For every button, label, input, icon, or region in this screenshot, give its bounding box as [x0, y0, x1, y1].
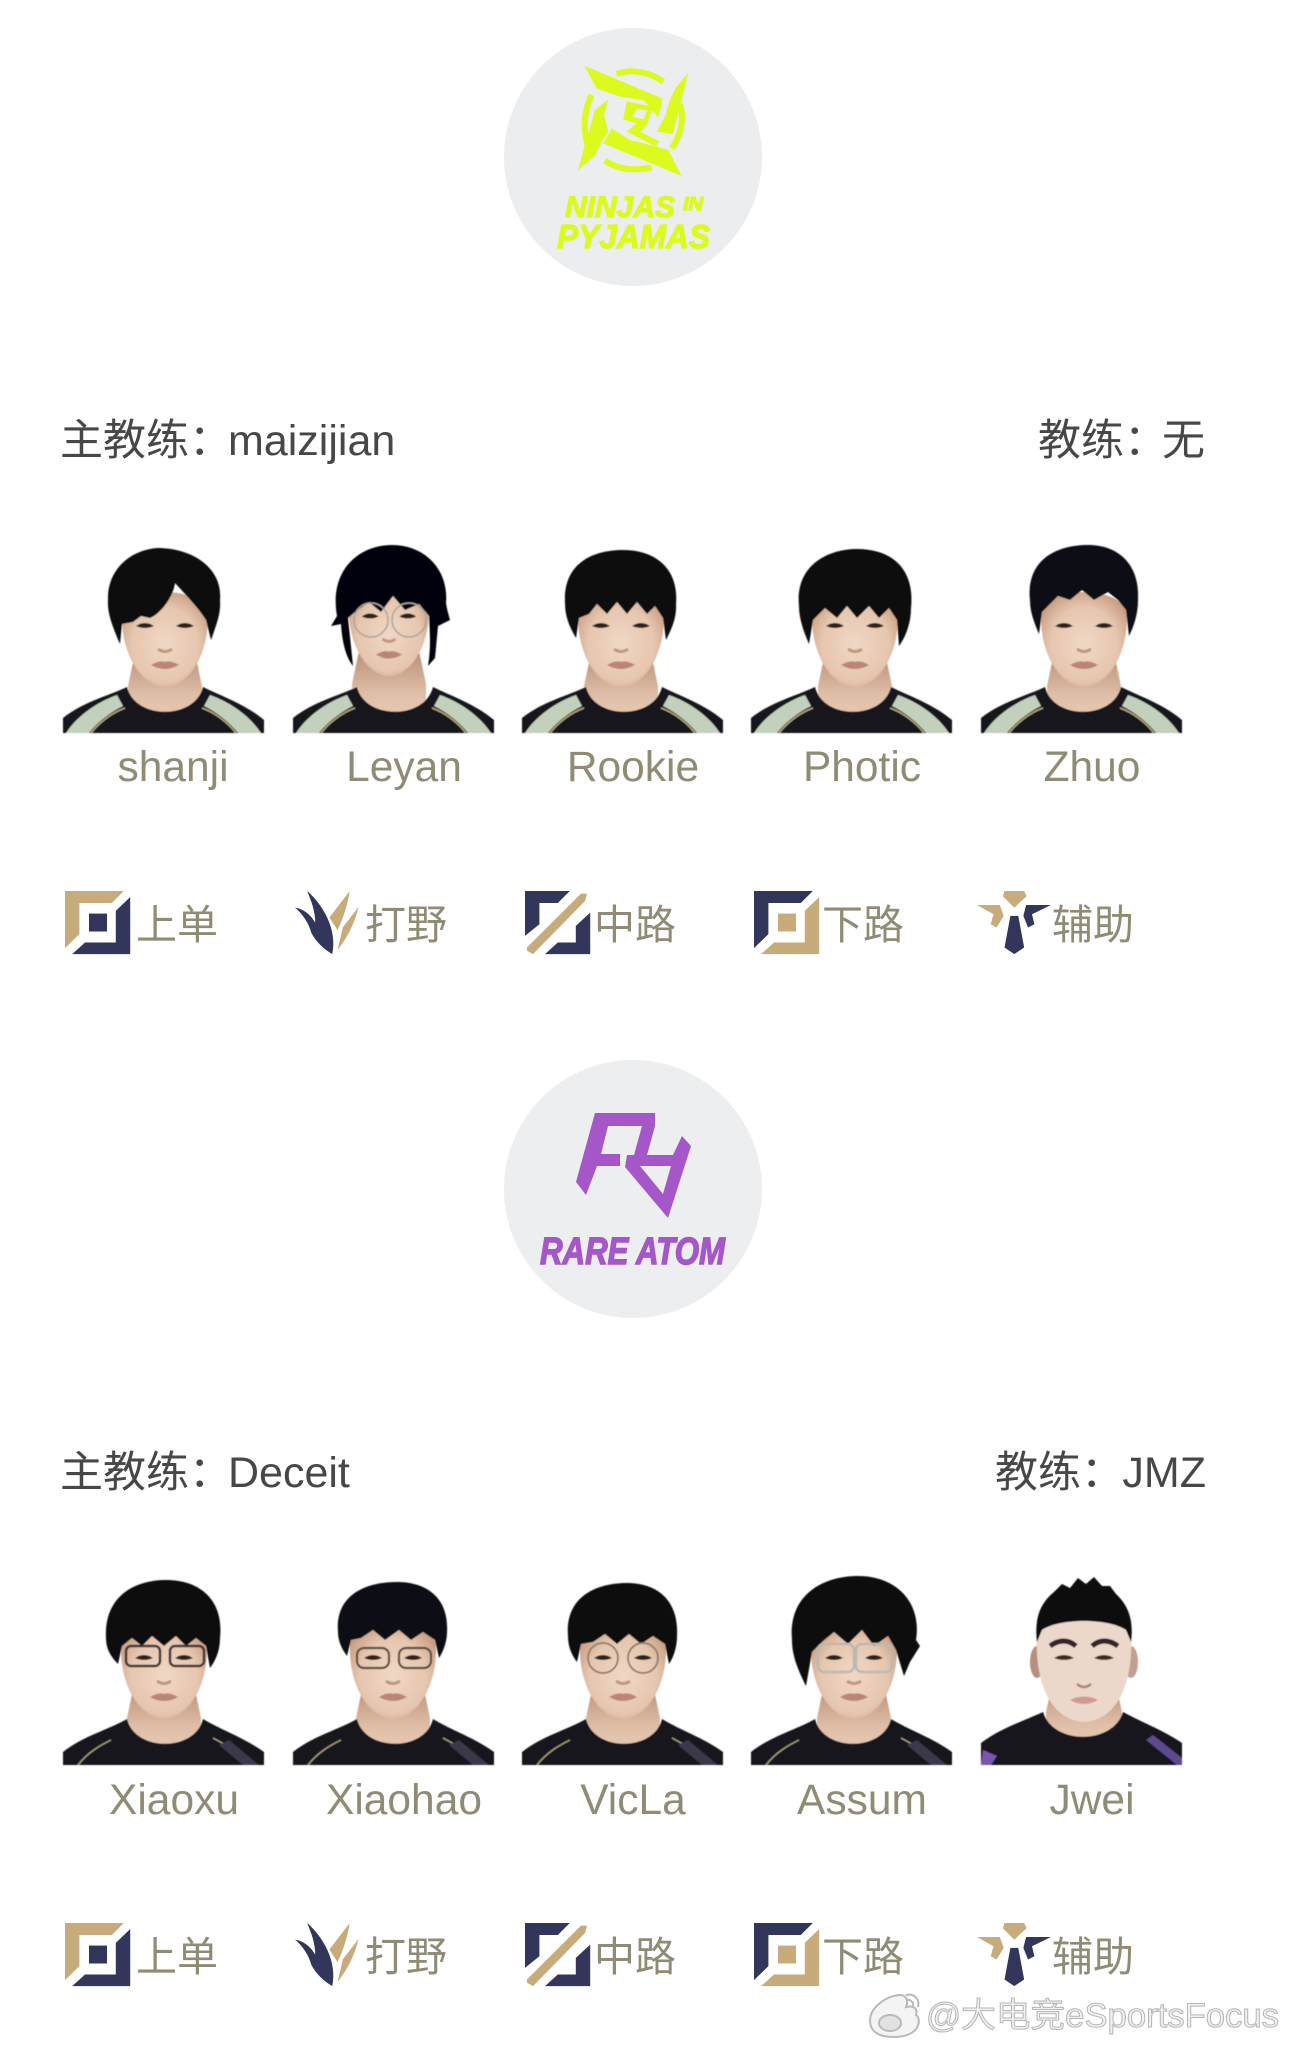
- logo wordmark: RARE ATOM: [540, 1231, 726, 1273]
- player name: Xiaohao: Xiaohao: [326, 1777, 482, 1824]
- coach line: RA head coach: Deceit: [228, 1449, 350, 1497]
- player name: Assum: Assum: [797, 1777, 927, 1824]
- role: support: 辅助: [1052, 1934, 1134, 1980]
- coach line: NIP coach: 教练：: [1038, 417, 1167, 465]
- icon: weibo: [870, 1995, 919, 2037]
- logo: Ninjas in Pyjamas: [504, 28, 762, 286]
- player name: Zhuo: Zhuo: [1044, 744, 1140, 791]
- coach line: RA head coach: 主教练：: [60, 1449, 232, 1497]
- player photo: Rookie: [522, 550, 723, 733]
- role: mid lane: [525, 891, 676, 954]
- icon: RA monogram: [576, 1113, 691, 1218]
- role: bot lane: 下路: [822, 902, 904, 948]
- coach line: RA coach: 教练：: [995, 1449, 1124, 1497]
- player photo: VicLa: [522, 1583, 723, 1765]
- player name: VicLa: VicLa: [580, 1777, 686, 1824]
- role: mid lane: [525, 1923, 676, 1986]
- role: top lane: 上单: [136, 1934, 218, 1980]
- player name: Jwei: Jwei: [1049, 1777, 1135, 1824]
- coach line: RA coach: JMZ: [1122, 1449, 1206, 1497]
- role: bot lane: 下路: [822, 1934, 904, 1980]
- logo wordmark: IN: [683, 194, 704, 214]
- role: mid lane: 中路: [594, 1934, 676, 1980]
- coach line: RA head coach: [60, 1449, 350, 1497]
- player name: Photic: Photic: [803, 744, 921, 791]
- coach line: NIP coach: 无: [1162, 417, 1205, 465]
- icon: NIP shuriken: [578, 66, 688, 176]
- player photo: shanji: [63, 548, 264, 733]
- player photo: Jwei: [981, 1577, 1182, 1765]
- role: support: 辅助: [1052, 902, 1134, 948]
- player photo: Zhuo: [981, 545, 1182, 733]
- player name: Xiaoxu: Xiaoxu: [109, 1777, 239, 1824]
- logo wordmark: PYJAMAS: [557, 218, 710, 255]
- role: bot lane: [754, 1923, 904, 1986]
- player name: Leyan: Leyan: [346, 744, 462, 791]
- role: top lane: [65, 1923, 218, 1986]
- role: mid lane: 中路: [594, 902, 676, 948]
- role: jungle: 打野: [365, 902, 447, 948]
- player name: Rookie: Rookie: [567, 744, 699, 791]
- coach line: NIP head coach: [60, 417, 395, 465]
- logo wordmark: [557, 191, 710, 255]
- coach line: RA coach: [995, 1449, 1206, 1497]
- logo: Rare Atom: [504, 1060, 762, 1318]
- role: top lane: [65, 891, 218, 954]
- coach line: NIP head coach: 主教练：: [60, 417, 232, 465]
- player photo: Assum: [751, 1576, 952, 1765]
- player photo: Leyan: [293, 545, 494, 733]
- logo wordmark: NINJAS: [565, 191, 675, 224]
- role: support: [977, 891, 1134, 954]
- player photo: Xiaoxu: [63, 1580, 264, 1765]
- player photo: Photic: [751, 549, 952, 733]
- role: top lane: 上单: [136, 902, 218, 948]
- coach line: NIP head coach: maizijian: [228, 417, 395, 465]
- role: bot lane: [754, 891, 904, 954]
- role: support: [977, 1923, 1134, 1986]
- player name: shanji: shanji: [117, 744, 229, 791]
- role: jungle: [295, 891, 447, 954]
- role: jungle: 打野: [365, 1934, 447, 1980]
- watermark: @大电竞eSportsFocus: [926, 1997, 1279, 2035]
- role: jungle: [295, 1923, 447, 1986]
- player photo: Xiaohao: [293, 1582, 494, 1765]
